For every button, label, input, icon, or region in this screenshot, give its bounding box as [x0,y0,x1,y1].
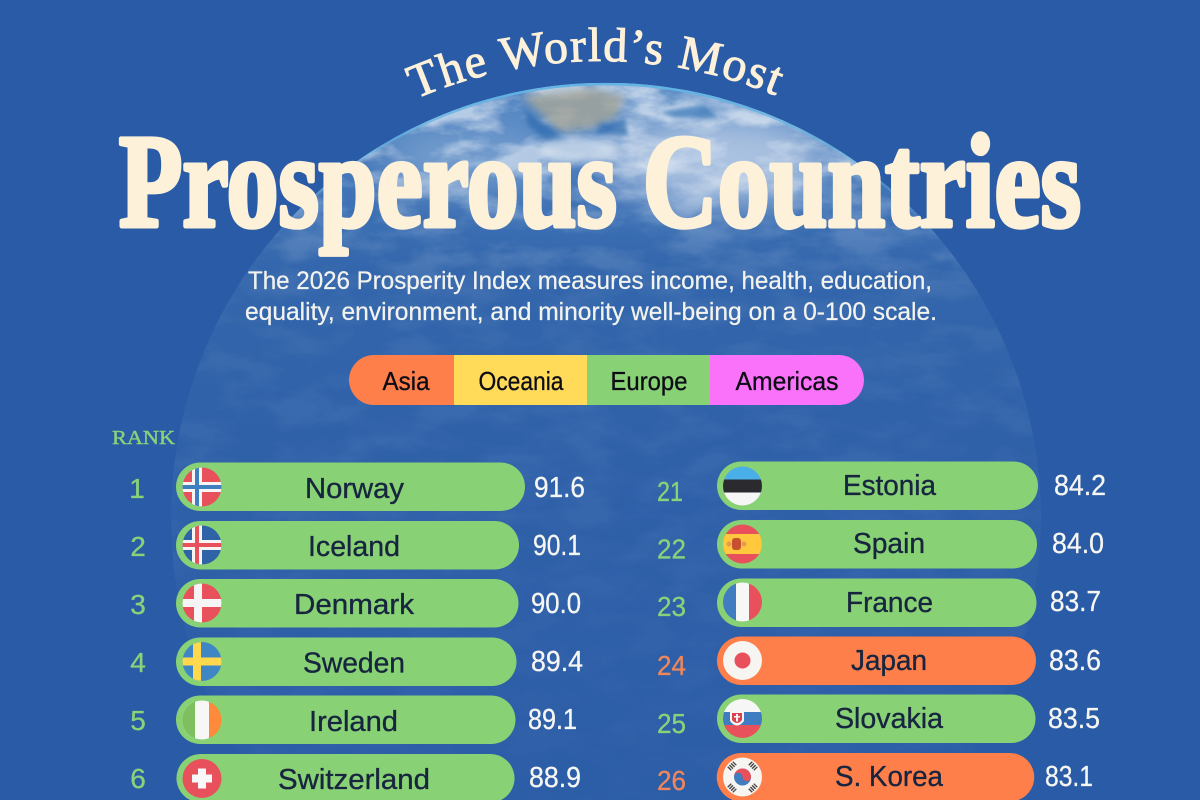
row: Estonia rank 21: Estonia [843,470,937,502]
row: Japan rank 24: 24 [657,650,686,681]
globe image [172,82,1040,678]
row: France rank 23: 83.7 [1050,586,1101,618]
legend: regions: Americas [736,366,838,396]
icon: South Korea flag [723,758,762,796]
subtitle text: equality, environment, and minority well-being on a 0-100 scale. [245,298,937,326]
row: Iceland rank 2: Iceland [308,531,400,563]
row: Ireland rank 5: 89.1 [528,704,577,736]
title: arched kicker: The World’s Most [404,27,784,97]
row: Slovakia rank 25: Slovakia [835,703,944,735]
row: France rank 23: France [846,587,933,619]
row: S. Korea rank 26: 83.1 [1045,761,1093,793]
icon: Denmark flag [182,583,222,623]
legend: regions: Oceania [478,366,564,396]
icon: Slovakia flag [723,699,763,739]
row: Denmark rank 3: Denmark [294,589,414,621]
subtitle text: The 2026 Prosperity Index measures income, health, education, [248,267,932,295]
icon: Iceland flag [182,525,222,565]
row: S. Korea rank 26 [657,753,1093,800]
row: Sweden rank 4 [130,638,583,686]
rank column label: RANK [112,427,176,449]
row: Slovakia rank 25 [657,694,1100,743]
row: Estonia rank 21: 21 [657,476,683,507]
row: Estonia rank 21: 84.2 [1054,470,1106,502]
row: Iceland rank 2: 2 [130,531,146,562]
icon: France flag [723,582,763,622]
icon: Estonia flag [723,466,763,506]
row: S. Korea rank 26: 26 [657,765,686,796]
row: Ireland rank 5: Ireland [309,706,398,738]
row: Spain rank 22 [657,520,1104,568]
row: Iceland rank 2 [130,521,581,570]
icon: Ireland flag [182,700,223,740]
row: France rank 23: 23 [657,591,686,622]
icon: Norway flag [182,467,222,507]
row: Spain rank 22: 84.0 [1052,528,1104,560]
legend: regions [349,355,864,405]
row: Switzerland rank 6 [130,754,581,800]
row: Slovakia rank 25: 83.5 [1048,703,1100,735]
row: France rank 23 [657,578,1101,627]
icon: Sweden flag [182,641,222,682]
row: Slovakia rank 25: 25 [657,708,686,739]
subtitle text [245,267,937,326]
row: Sweden rank 4: 4 [130,647,146,678]
legend: regions: Asia [382,366,430,396]
icon: Japan flag [723,641,762,680]
row: Norway rank 1: 1 [129,473,145,504]
row: Japan rank 24: Japan [851,645,927,677]
row: Spain rank 22: Spain [853,528,925,560]
row: Iceland rank 2: 90.1 [533,530,581,562]
row: Denmark rank 3 [130,579,581,628]
row: Estonia rank 21 [657,462,1106,510]
row: Sweden rank 4: 89.4 [531,646,583,678]
row: Spain rank 22: 22 [657,534,686,564]
row: Japan rank 24: 83.6 [1049,645,1101,677]
row: Switzerland rank 6: Switzerland [278,764,430,796]
row: S. Korea rank 26: S. Korea [835,761,944,793]
row: Sweden rank 4: Sweden [303,648,405,680]
row: Denmark rank 3: 3 [130,589,146,620]
row: Norway rank 1: Norway [305,473,404,505]
row: Switzerland rank 6: 88.9 [529,762,581,794]
row: Ireland rank 5 [130,696,577,744]
row: Switzerland rank 6: 6 [130,763,146,794]
row: Ireland rank 5: 5 [130,705,146,736]
row: Norway rank 1: 91.6 [534,472,585,504]
legend: regions: Europe [610,366,688,396]
icon: Spain flag [723,524,763,564]
row: Japan rank 24 [657,636,1101,685]
icon: Switzerland flag [182,759,222,798]
row: Denmark rank 3: 90.0 [531,588,581,620]
row: Norway rank 1 [129,462,585,511]
